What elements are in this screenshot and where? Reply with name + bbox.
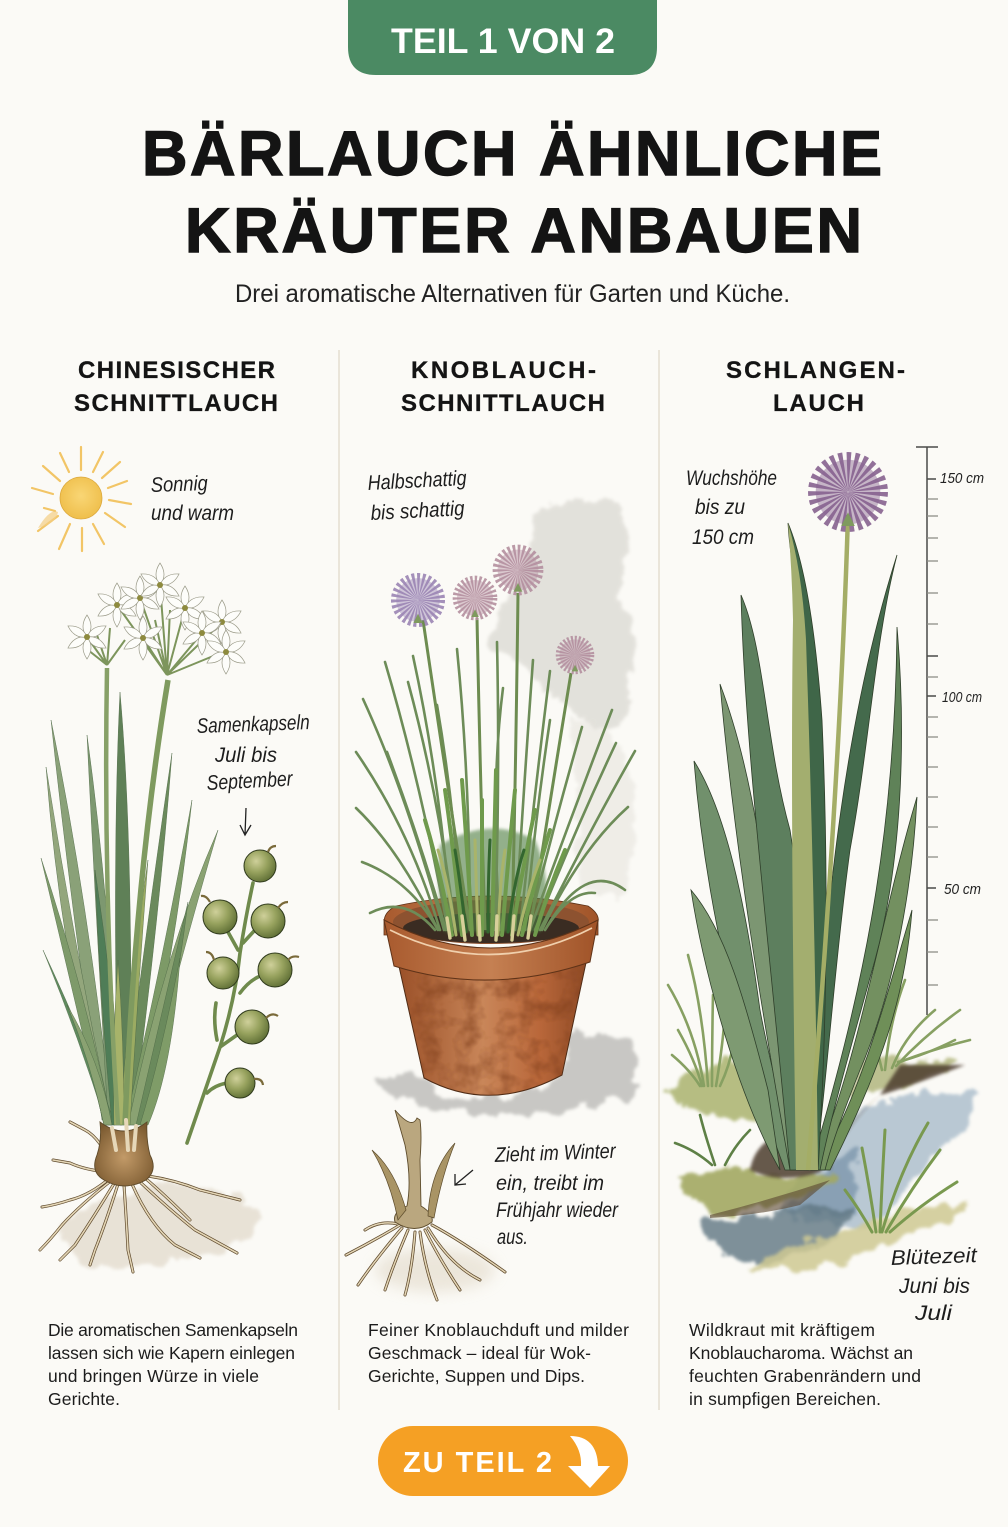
outer leaves xyxy=(356,642,635,930)
scale label 100 cm: 100 cm xyxy=(942,689,982,706)
annotation: seed capsules: September xyxy=(206,767,294,795)
heading: Chinesischer Schnittlauch: SCHNITTLAUCH xyxy=(74,390,278,417)
icon: curved down arrow xyxy=(568,1436,610,1488)
badge: part 1 of 2 xyxy=(348,0,657,75)
annotation: flowering time: Juli xyxy=(914,1302,954,1325)
dense foliage mass xyxy=(438,829,546,932)
arrow: to seed capsules xyxy=(240,808,251,835)
allium flower head xyxy=(816,460,880,526)
body text: field garlic: in sumpfigen Bereichen. xyxy=(689,1389,881,1409)
heading: Schlangenlauch: SCHLANGEN- xyxy=(726,357,905,384)
heading: Knoblauch-Schnittlauch: KNOBLAUCH- xyxy=(411,357,596,384)
title xyxy=(142,119,882,266)
badge: part 1 of 2: TEIL 1 VON 2 xyxy=(391,22,615,61)
mossy banks xyxy=(665,1054,960,1216)
heading: Knoblauch-Schnittlauch: SCHNITTLAUCH xyxy=(401,390,605,417)
leaves xyxy=(41,692,218,1125)
body text: garlic chives: Geschmack – ideal für Wok- xyxy=(368,1343,591,1363)
back of pot rim and soil xyxy=(384,896,598,944)
annotation: flowering time: Blütezeit xyxy=(890,1244,978,1270)
annotation: seed capsules: Juli bis xyxy=(214,744,277,767)
heading: Schlangenlauch xyxy=(726,357,905,417)
scale label 50 cm: 50 cm xyxy=(944,881,981,898)
annotation: flowering time xyxy=(890,1244,978,1325)
annotation: dies back in winter: Zieht im Winter xyxy=(494,1140,617,1167)
body text: field garlic: Knoblaucharoma. Wächst an xyxy=(689,1343,913,1363)
button: to part 2: ZU TEIL 2 xyxy=(403,1447,552,1479)
plant: Chinese chives xyxy=(40,563,262,1272)
dark earth bank xyxy=(710,1065,965,1218)
annotation: seed capsules: Samenkapseln xyxy=(196,711,310,738)
flower stems xyxy=(106,668,168,1125)
body text: garlic chives xyxy=(368,1320,629,1386)
annotation: dies back in winter xyxy=(494,1140,619,1249)
annotation: growth height: 150 cm xyxy=(692,526,754,549)
terracotta pot xyxy=(384,920,598,1095)
annotation: growth height xyxy=(686,467,777,549)
annotation: semi-shade: Halbschattig xyxy=(367,467,467,495)
soil wash under roots xyxy=(60,1184,262,1270)
heading: Chinesischer Schnittlauch: CHINESISCHER xyxy=(78,357,275,384)
inner leaves xyxy=(425,770,565,940)
body text: garlic chives: Feiner Knoblauchduft und milder xyxy=(368,1320,629,1340)
subtitle: Drei aromatische Alternativen für Garten und Küche. xyxy=(235,280,790,308)
body text: Chinese chives: Die aromatischen Samenkapseln xyxy=(48,1320,298,1340)
water xyxy=(700,1093,975,1265)
button: to part 2 xyxy=(378,1426,628,1496)
arrow: to root xyxy=(455,1170,473,1185)
seed capsule branch xyxy=(187,846,299,1143)
flower heads xyxy=(396,549,591,671)
body text: field garlic xyxy=(689,1320,921,1409)
plant: garlic chives in pot xyxy=(356,549,637,1115)
title: BÄRLAUCH ÄHNLICHE xyxy=(142,119,882,189)
plant: field garlic by the water xyxy=(665,460,975,1270)
flower stalks xyxy=(423,593,571,930)
column divider left xyxy=(338,350,340,1410)
column divider right xyxy=(658,350,660,1410)
heading: Chinesischer Schnittlauch xyxy=(74,357,278,417)
heading: Knoblauch-Schnittlauch xyxy=(401,357,605,417)
grey wash behind garlic chives xyxy=(490,499,634,900)
shadow xyxy=(372,1032,637,1115)
annotation: semi-shade: bis schattig xyxy=(370,497,465,525)
body text: Chinese chives: Gerichte. xyxy=(48,1389,120,1409)
height scale xyxy=(916,447,984,1015)
annotation: sunny and warm: und warm xyxy=(151,502,234,525)
body text: garlic chives: Gerichte, Suppen und Dips. xyxy=(368,1366,585,1386)
annotation: growth height: Wuchshöhe xyxy=(686,467,777,490)
plant: dormant root xyxy=(346,1110,505,1300)
annotation: sunny and warm: Sonnig xyxy=(150,472,208,497)
body text: field garlic: Wildkraut mit kräftigem xyxy=(689,1320,875,1340)
annotation: dies back in winter: Frühjahr wieder xyxy=(496,1199,619,1222)
annotation: seed capsules xyxy=(196,711,310,795)
title: KRÄUTER ANBAUEN xyxy=(185,196,862,266)
leaves xyxy=(691,523,917,1170)
grass clumps xyxy=(668,955,970,1232)
annotation: sunny and warm xyxy=(150,472,234,525)
body text: Chinese chives: lassen sich wie Kapern einlegen xyxy=(48,1343,295,1363)
annotation: semi-shade xyxy=(367,467,467,525)
icon: sun xyxy=(32,447,131,551)
scale label 150 cm: 150 cm xyxy=(940,470,984,487)
umbel stalks xyxy=(87,585,223,675)
annotation: flowering time: Juni bis xyxy=(898,1275,970,1298)
flowers xyxy=(66,563,247,674)
body text: Chinese chives xyxy=(48,1320,298,1409)
annotation: dies back in winter: ein, treibt im xyxy=(496,1172,604,1195)
annotation: dies back in winter: aus. xyxy=(497,1226,528,1249)
bulb and roots xyxy=(40,1120,240,1272)
heading: Schlangenlauch: LAUCH xyxy=(773,390,864,417)
body text: field garlic: feuchten Grabenrändern und xyxy=(689,1366,921,1386)
annotation: growth height: bis zu xyxy=(695,496,745,519)
flower stem xyxy=(808,515,848,1170)
bottom moss xyxy=(750,1205,970,1270)
body text: Chinese chives: und bringen Würze in viele xyxy=(48,1366,259,1386)
